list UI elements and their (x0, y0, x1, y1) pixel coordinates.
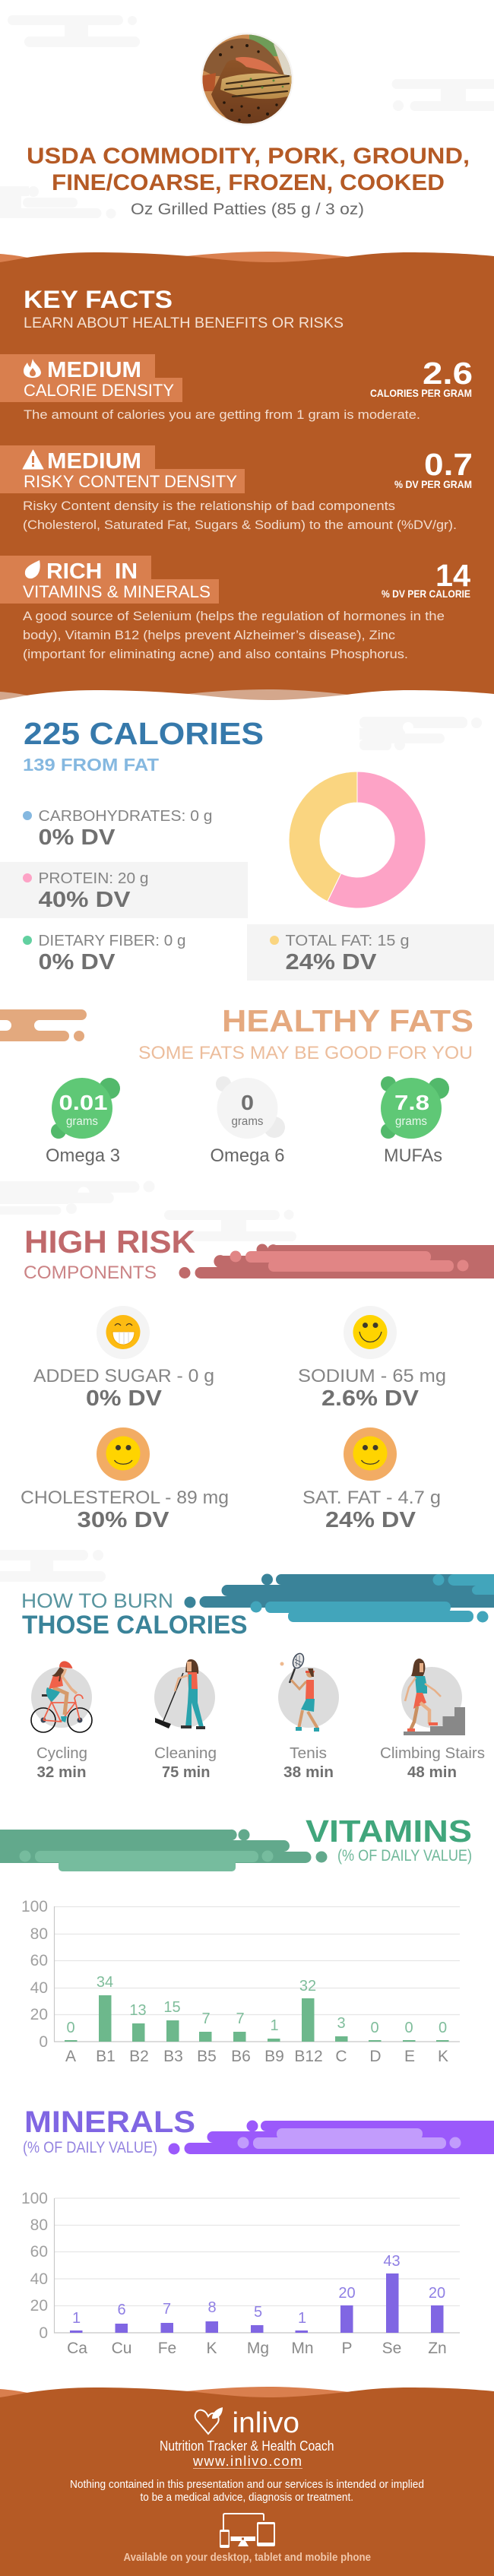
fact: rich in vitamins and minerals: VITAMINS & MINERALS (23, 582, 211, 601)
activity: cleaning (154, 1659, 217, 1781)
activity: cleaning: 75 min (162, 1764, 210, 1781)
omega 3 badge: grams (66, 1115, 98, 1128)
bar chart: vitamins: 60 (30, 1952, 48, 1969)
bar chart: vitamins: 7 (236, 2010, 245, 2027)
bar chart: minerals: 1 (72, 2310, 81, 2327)
legend: dietary fiber: DIETARY FIBER: 0 g (38, 933, 185, 949)
risk: saturated fat: 24% DV (325, 1508, 416, 1532)
bar chart: vitamins: 0 (370, 2020, 379, 2036)
decoration: vitamins bars (0, 1829, 327, 1871)
activity: climbing stairs: Climbing Stairs (380, 1745, 485, 1762)
bar chart: vitamins: 1 (270, 2017, 279, 2034)
panel: footer (0, 2387, 494, 2576)
omega 3 badge: 0.01 (59, 1091, 108, 1114)
bar chart: minerals: 1 (298, 2310, 306, 2327)
those calories heading: THOSE CALORIES (22, 1611, 248, 1640)
legend: total fat: TOTAL FAT: 15 g (286, 933, 409, 949)
bar chart: vitamins: 20 (30, 2006, 48, 2023)
how to burn heading: HOW TO BURN (21, 1589, 173, 1612)
tagline: Nutrition Tracker & Health Coach (160, 2438, 334, 2454)
icon: leaf (25, 560, 40, 578)
fact: rich in vitamins and minerals: 14 (435, 558, 470, 593)
activity: tennis (278, 1652, 339, 1781)
fact: calorie density: CALORIE DENSITY (24, 381, 174, 400)
legend: carbohydrates (23, 808, 213, 850)
key facts subheading: LEARN ABOUT HEALTH BENEFITS OR RISKS (24, 315, 344, 331)
mufas badge: MUFAs (384, 1145, 442, 1166)
bar chart: minerals: 43 (383, 2253, 401, 2270)
bar chart: vitamins: B9 (264, 2048, 284, 2065)
omega 6 badge (210, 1076, 285, 1166)
omega 6 badge: 0 (241, 1091, 254, 1114)
background decoration: high risk stripes (0, 1181, 296, 1241)
fact: rich in vitamins and minerals: % DV PER CALORIE (382, 588, 470, 600)
legend: total fat (247, 924, 494, 981)
bar chart: vitamins: 40 (30, 1979, 48, 1997)
bar chart: minerals (21, 2190, 460, 2357)
bar chart: minerals: Ca (67, 2340, 87, 2357)
activity: cycling: 32 min (36, 1764, 87, 1781)
omega 6 badge: grams (231, 1115, 264, 1128)
bar chart: vitamins: 0 (439, 2020, 447, 2036)
activity: cleaning: Cleaning (154, 1745, 217, 1762)
bar chart: vitamins: 3 (337, 2015, 346, 2032)
bar chart: minerals: 5 (254, 2304, 262, 2321)
activity: cycling: Cycling (36, 1745, 87, 1762)
risk: sodium (298, 1306, 446, 1411)
high risk heading: HIGH RISK (24, 1224, 195, 1259)
mufas badge (381, 1076, 449, 1166)
bar chart: minerals: 20 (30, 2297, 48, 2315)
vitamins heading: VITAMINS (306, 1814, 472, 1849)
bar chart: minerals: Se (382, 2340, 401, 2357)
risk: added sugar (33, 1306, 214, 1411)
fact: risky content density: (Cholesterol, Saturated Fat, Sugars & Sodium) to the amount (%DV/gr). (23, 518, 457, 532)
title: USDA COMMODITY, PORK, GROUND, (27, 144, 470, 169)
bar chart: vitamins: 0 (66, 2020, 75, 2036)
bar chart: vitamins: 13 (129, 2002, 147, 2019)
title: FINE/COARSE, FROZEN, COOKED (52, 170, 445, 195)
vitamins subheading: (% OF DAILY VALUE) (337, 1847, 472, 1865)
background decoration: calories stripes (359, 717, 482, 750)
omega 6 badge: Omega 6 (210, 1145, 284, 1166)
photo: grilled pork chop (201, 33, 293, 125)
risk: sodium: 2.6% DV (321, 1386, 420, 1411)
decoration: minerals bars (169, 2121, 494, 2154)
risk: sodium: SODIUM - 65 mg (298, 1366, 446, 1386)
bar chart: vitamins: 15 (163, 1999, 181, 2016)
logo: inlivo: inlivo (233, 2407, 299, 2439)
fact: calorie density (0, 354, 473, 422)
calories heading: 225 CALORIES (24, 716, 264, 751)
availability note: Available on your desktop, tablet and mobile phone (123, 2551, 371, 2564)
bar chart: minerals: Cu (112, 2340, 131, 2357)
calories from fat: 139 FROM FAT (23, 755, 159, 775)
bar chart: minerals: Mg (247, 2340, 269, 2357)
icon: smiling face (353, 1315, 388, 1349)
healthy fats heading: HEALTHY FATS (222, 1003, 473, 1038)
key facts heading: KEY FACTS (24, 286, 173, 313)
bar chart: vitamins: B12 (294, 2048, 323, 2065)
omega 3 badge (46, 1078, 120, 1166)
minerals heading: MINERALS (24, 2105, 195, 2139)
legend: protein: 40% DV (38, 888, 131, 912)
bar chart: minerals: 8 (207, 2299, 217, 2316)
bar chart: minerals: 60 (30, 2243, 48, 2261)
icon: person sweeping (155, 1659, 205, 1729)
logo: inlivo (195, 2407, 299, 2439)
bar chart: vitamins: 80 (30, 1925, 48, 1943)
bar chart: vitamins: B6 (231, 2048, 251, 2065)
bar chart: minerals: Zn (428, 2340, 447, 2357)
bar chart: vitamins: B2 (129, 2048, 149, 2065)
bar chart: minerals: P (341, 2340, 353, 2357)
minerals subheading: (% OF DAILY VALUE) (23, 2139, 157, 2156)
icon: smiling face (106, 1437, 140, 1470)
risk: added sugar: 0% DV (86, 1386, 163, 1411)
fact: calorie density: CALORIES PER GRAM (370, 387, 472, 399)
decoration: healthy fats stripes (0, 1009, 87, 1041)
risk: saturated fat (302, 1427, 441, 1532)
risk: added sugar: ADDED SUGAR - 0 g (33, 1366, 214, 1386)
bar chart: minerals: 100 (21, 2190, 48, 2207)
legend: protein (0, 862, 248, 918)
risk: cholesterol: 30% DV (78, 1508, 169, 1532)
fact: risky content density: 0.7 (424, 447, 473, 482)
disclaimer: to be a medical advice, diagnosis or treatment. (140, 2491, 353, 2504)
activity: cycling (31, 1661, 92, 1781)
title (27, 144, 470, 195)
decoration: burn bars (184, 1573, 494, 1622)
background decoration: left stripes beside title (0, 186, 116, 219)
fact: calorie density: 2.6 (423, 356, 473, 391)
bar chart: vitamins: D (369, 2048, 382, 2065)
bar chart: minerals: 6 (117, 2302, 126, 2318)
background decoration: top right stripes (392, 79, 494, 111)
fact: rich in vitamins and minerals (0, 556, 470, 661)
fact: rich in vitamins and minerals: A good source of Selenium (helps the regulation of hormones in the (23, 609, 445, 623)
icon: person climbing stairs (404, 1659, 465, 1735)
disclaimer (70, 2478, 424, 2504)
fact: calorie density: MEDIUM (47, 358, 141, 382)
fact: calorie density: The amount of calories you are getting from 1 gram is moderate. (24, 407, 420, 422)
fact: rich in vitamins and minerals: (important for eliminating acne) and also contains Phosphorus. (23, 647, 408, 661)
activity: tennis: Tenis (290, 1745, 327, 1762)
bar chart: vitamins: 0 (404, 2020, 413, 2036)
legend: dietary fiber (23, 933, 185, 974)
fact: rich in vitamins and minerals: RICH IN (46, 559, 138, 584)
bar chart: vitamins: B5 (197, 2048, 217, 2065)
bar chart: vitamins: C (335, 2048, 347, 2065)
mufas badge: 7.8 (394, 1091, 429, 1114)
icon: cyclist (31, 1661, 92, 1732)
decoration: high risk bars (179, 1244, 494, 1278)
bar chart: minerals: 40 (30, 2270, 48, 2288)
serving size subtitle: Oz Grilled Patties (85 g / 3 oz) (131, 201, 364, 218)
panel: key facts (0, 252, 494, 718)
bar chart: vitamins: 34 (97, 1974, 113, 1991)
bar chart: vitamins: A (65, 2048, 76, 2065)
bar chart: vitamins: 32 (299, 1978, 316, 1995)
fact: risky content density: % DV PER GRAM (394, 478, 472, 490)
risk: cholesterol (21, 1427, 229, 1532)
bar chart: vitamins (21, 1898, 460, 2065)
donut chart (289, 772, 426, 908)
fact: risky content density: Risky Content density is the relationship of bad components (23, 499, 395, 513)
risk: cholesterol: CHOLESTEROL - 89 mg (21, 1488, 229, 1508)
legend: total fat: 24% DV (286, 950, 377, 974)
fact: risky content density (0, 445, 473, 532)
bar chart: vitamins: E (404, 2048, 415, 2065)
bar chart: minerals: 0 (39, 2324, 48, 2342)
high risk subheading: COMPONENTS (24, 1263, 157, 1283)
legend: carbohydrates: CARBOHYDRATES: 0 g (38, 808, 213, 825)
fact: risky content density: RISKY CONTENT DENSITY (24, 472, 237, 491)
disclaimer: Nothing contained in this presentation and our services is intended or implied (70, 2478, 424, 2491)
bar chart: vitamins: 0 (39, 2033, 48, 2051)
website link: www.inlivo.com (192, 2454, 302, 2469)
mufas badge: grams (395, 1115, 427, 1128)
background decoration: burn stripes (0, 1550, 106, 1582)
icon: tennis player (280, 1652, 319, 1732)
activity: climbing stairs: 48 min (407, 1764, 457, 1781)
icon: grinning face (106, 1315, 140, 1349)
omega 3 badge: Omega 3 (46, 1145, 120, 1166)
risk: saturated fat: SAT. FAT - 4.7 g (302, 1488, 441, 1508)
activity: tennis: 38 min (283, 1764, 334, 1781)
healthy fats subheading: SOME FATS MAY BE GOOD FOR YOU (138, 1043, 473, 1063)
bar chart: minerals: 7 (163, 2301, 171, 2318)
fact: risky content density: MEDIUM (47, 449, 141, 474)
icon: smiling face (353, 1437, 388, 1470)
fact: rich in vitamins and minerals: body), Vitamin B12 (helps prevent Alzheimer’s disease), Zinc (23, 628, 396, 642)
bar chart: minerals: Mn (291, 2340, 314, 2357)
bar chart: minerals: Fe (158, 2340, 176, 2357)
bar chart: minerals: 20 (338, 2285, 356, 2302)
legend: dietary fiber: 0% DV (38, 950, 116, 974)
bar chart: minerals: 80 (30, 2216, 48, 2234)
icon: devices (220, 2514, 275, 2548)
bar chart: vitamins: 100 (21, 1898, 48, 1915)
bar chart: vitamins: K (438, 2048, 448, 2065)
activity: climbing stairs (380, 1659, 485, 1781)
bar chart: vitamins: B3 (163, 2048, 183, 2065)
background decoration: top left stripes (8, 15, 140, 47)
bar chart: vitamins: B1 (96, 2048, 116, 2065)
bar chart: minerals: 20 (429, 2285, 445, 2302)
icon: flame (24, 359, 41, 378)
legend: protein: PROTEIN: 20 g (38, 870, 149, 887)
bar chart: minerals: K (206, 2340, 217, 2357)
legend: carbohydrates: 0% DV (38, 825, 116, 850)
icon: warning triangle (23, 450, 43, 469)
bar chart: vitamins: 7 (201, 2010, 211, 2027)
